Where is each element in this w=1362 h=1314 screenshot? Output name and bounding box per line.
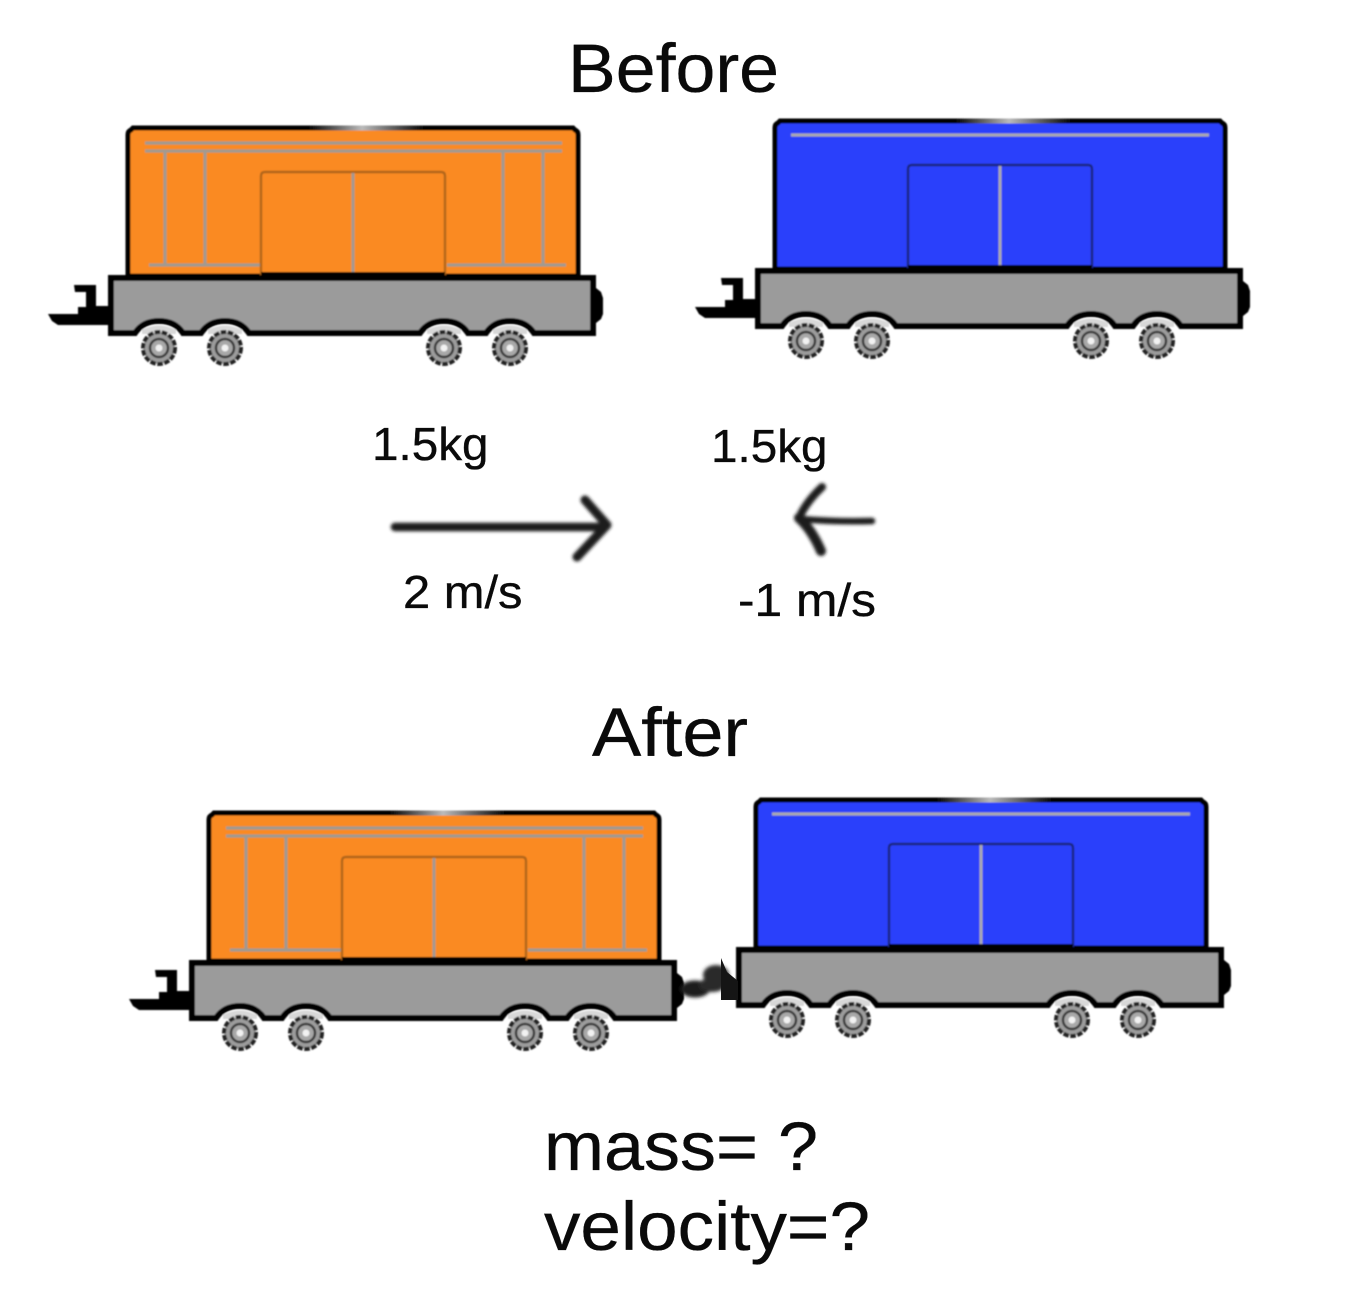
coupling between the cars [680,958,738,1000]
label: blue car velocity: -1 m/s [738,574,876,626]
label: blue car mass: 1.5kg [711,420,828,472]
orange train car, after [129,813,684,1049]
question: velocity: velocity=? [544,1188,870,1265]
label: orange car velocity: 2 m/s [403,566,522,618]
question: mass: mass= ? [544,1108,818,1185]
orange train car, before [48,128,603,364]
arrow: blue car moving left [799,487,872,551]
arrow: orange car moving right [395,500,607,557]
blue train car, before [695,121,1250,357]
blue train car, after [739,800,1231,1036]
label: orange car mass: 1.5kg [372,418,488,470]
title: After: After [592,694,748,771]
title: Before: Before [568,30,779,107]
